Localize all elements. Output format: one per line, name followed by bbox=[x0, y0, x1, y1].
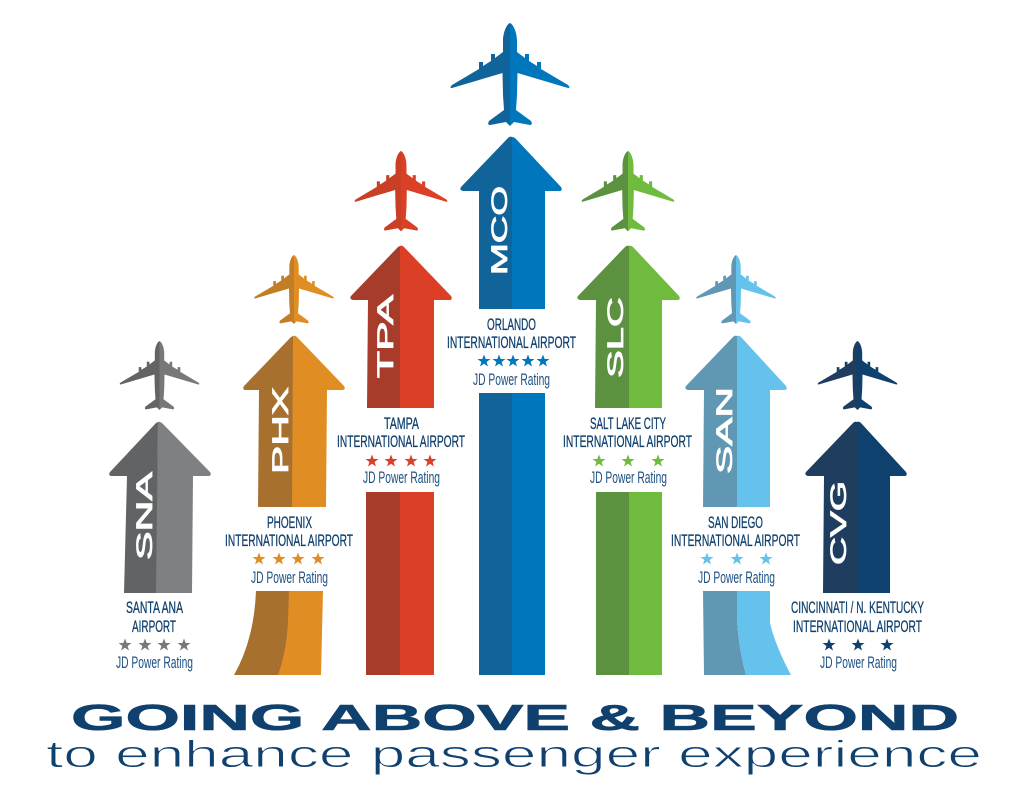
arrow trail: MCO bbox=[479, 393, 545, 675]
column: CVG Cincinnati bbox=[791, 341, 924, 672]
label: Tampa International Airport bbox=[337, 414, 465, 451]
rating label: TPA: JD Power Rating bbox=[363, 468, 440, 487]
label: Santa Ana Airport: AIRPORT bbox=[132, 617, 176, 636]
rating stars: TPA bbox=[366, 454, 436, 466]
label: Cincinnati / N. Kentucky International Airport bbox=[791, 598, 924, 636]
arrow code: SAN: SAN bbox=[712, 387, 737, 474]
label: Phoenix International Airport: PHOENIX bbox=[267, 513, 312, 532]
rating stars: MCO bbox=[478, 354, 550, 366]
label: Salt Lake City International Airport: SALT LAKE CITY bbox=[590, 414, 666, 433]
icon: SNA plane bbox=[120, 341, 199, 410]
subtitle: to enhance passenger experience bbox=[46, 734, 982, 776]
rating label: SNA: JD Power Rating bbox=[116, 653, 193, 672]
label: Salt Lake City International Airport: INTERNATIONAL AIRPORT bbox=[563, 432, 692, 451]
rating stars: SNA bbox=[118, 638, 190, 650]
title: GOING ABOVE & BEYOND bbox=[71, 697, 959, 738]
column: PHX Phoenix bbox=[225, 255, 353, 675]
arrow: SLC bbox=[577, 246, 680, 408]
column: SAN San Diego bbox=[671, 255, 800, 675]
rating label: SAN: JD Power Rating bbox=[698, 568, 775, 587]
icon: MCO plane bbox=[450, 23, 570, 126]
arrow trail: PHX bbox=[234, 591, 323, 675]
rating stars: CVG bbox=[822, 638, 894, 650]
label: Orlando International Airport bbox=[447, 315, 576, 352]
label: Orlando International Airport: ORLANDO bbox=[487, 315, 536, 334]
label: San Diego International Airport: INTERNATIONAL AIRPORT bbox=[671, 531, 800, 550]
label: Orlando International Airport: INTERNATIONAL AIRPORT bbox=[447, 333, 576, 352]
arrow trail: SAN bbox=[703, 591, 791, 675]
arrow: PHX bbox=[243, 336, 345, 507]
arrow: SAN bbox=[685, 336, 787, 507]
icon: SAN plane bbox=[696, 255, 776, 324]
rating label: MCO: JD Power Rating bbox=[473, 370, 550, 389]
arrow: CVG bbox=[805, 422, 907, 593]
column: TPA Tampa bbox=[337, 151, 465, 675]
icon: CVG plane bbox=[818, 341, 897, 410]
rating stars: SLC bbox=[592, 454, 664, 466]
arrow code: SLC: SLC bbox=[603, 297, 628, 378]
label: Santa Ana Airport bbox=[126, 598, 183, 636]
icon: PHX plane bbox=[254, 255, 334, 324]
column: SLC Salt Lake City bbox=[563, 151, 692, 675]
label: San Diego International Airport: SAN DIEGO bbox=[708, 513, 763, 532]
rating label: CVG: JD Power Rating bbox=[820, 653, 897, 672]
arrow code: CVG: CVG bbox=[826, 481, 851, 565]
arrow code: MCO: MCO bbox=[487, 186, 512, 275]
label: Santa Ana Airport: SANTA ANA bbox=[126, 598, 183, 617]
label: Salt Lake City International Airport bbox=[563, 414, 692, 451]
label: Tampa International Airport: TAMPA bbox=[384, 414, 419, 433]
rating label: PHX: JD Power Rating bbox=[251, 568, 328, 587]
label: Cincinnati / N. Kentucky International Airport: CINCINNATI / N. KENTUCKY bbox=[791, 598, 924, 617]
label: Tampa International Airport: INTERNATIONAL AIRPORT bbox=[337, 432, 465, 451]
arrow code: PHX: PHX bbox=[268, 386, 293, 474]
arrow code: TPA: TPA bbox=[373, 294, 398, 378]
label: Phoenix International Airport: INTERNATIONAL AIRPORT bbox=[225, 531, 353, 550]
icon: TPA plane bbox=[355, 151, 447, 231]
arrow code: SNA: SNA bbox=[132, 471, 157, 560]
rating stars: SAN bbox=[700, 552, 772, 564]
arrow trail: TPA bbox=[366, 492, 434, 675]
column: SNA Santa Ana bbox=[109, 341, 211, 672]
arrow trail: SLC bbox=[596, 492, 662, 675]
rating label: SLC: JD Power Rating bbox=[590, 468, 667, 487]
label: Cincinnati / N. Kentucky International Airport: INTERNATIONAL AIRPORT bbox=[793, 617, 922, 636]
arrow: SNA bbox=[109, 422, 211, 593]
label: San Diego International Airport bbox=[671, 513, 800, 550]
arrow: TPA bbox=[350, 246, 452, 408]
label: Phoenix International Airport bbox=[225, 513, 353, 550]
icon: SLC plane bbox=[582, 151, 674, 231]
column: MCO Orlando bbox=[447, 23, 576, 675]
rating stars: PHX bbox=[252, 552, 324, 564]
arrow: MCO bbox=[460, 137, 562, 309]
